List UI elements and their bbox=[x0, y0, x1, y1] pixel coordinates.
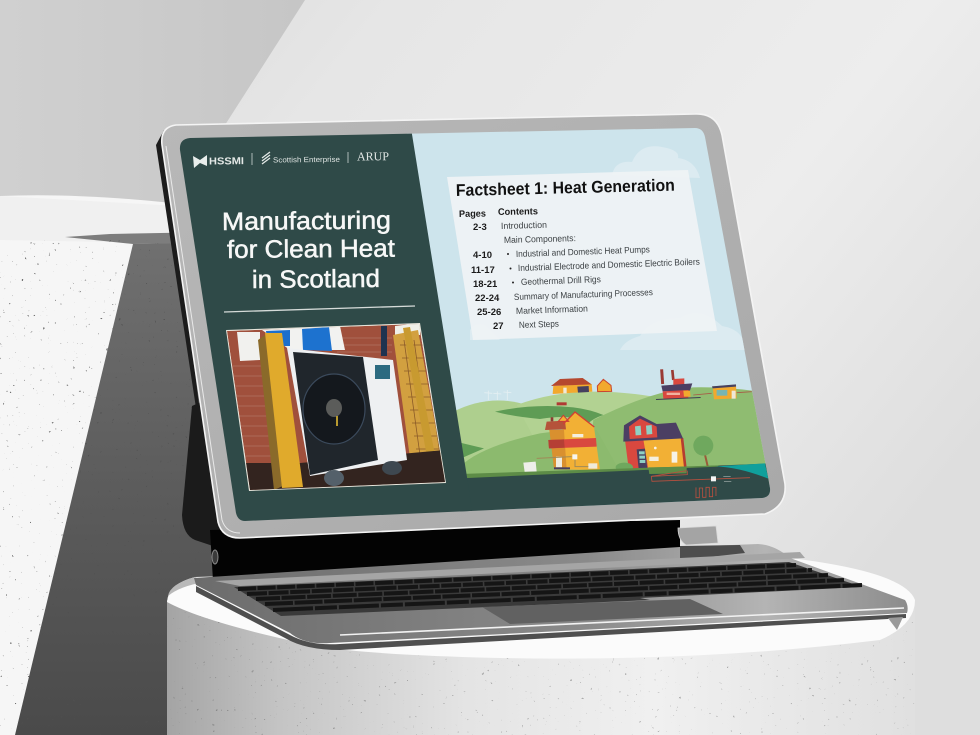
card heading: Factsheet 1: Heat Generation bbox=[456, 176, 675, 200]
farm house bbox=[551, 378, 612, 405]
panel: factsheet contents card bbox=[447, 170, 717, 340]
wooden lattice bbox=[393, 330, 442, 462]
tablet stand and hinge bbox=[156, 130, 718, 581]
brick courses bbox=[230, 338, 392, 456]
pages column: 27 bbox=[493, 321, 504, 332]
heat pump unit bbox=[523, 462, 537, 472]
contents column bbox=[501, 220, 700, 330]
title: Manufacturing bbox=[222, 207, 391, 236]
pages column: Contents bbox=[498, 206, 538, 218]
pedestal top surface bbox=[167, 558, 915, 659]
title bbox=[222, 207, 395, 294]
heat pump photo bbox=[226, 323, 446, 491]
title divider bbox=[224, 306, 415, 312]
hinge clip bbox=[678, 526, 718, 545]
logos bbox=[193, 149, 389, 168]
pages column: 11-17 bbox=[471, 265, 495, 276]
screen bbox=[170, 120, 780, 530]
panel: dark green cover bbox=[170, 128, 475, 530]
fence bbox=[258, 335, 282, 490]
title: in Scotland bbox=[252, 265, 380, 294]
pages column: 25-26 bbox=[477, 307, 501, 318]
pages column: 22-24 bbox=[475, 293, 500, 304]
keyboard front edge bbox=[196, 586, 906, 650]
tablet bbox=[162, 114, 785, 538]
pages column: 2-3 bbox=[473, 222, 487, 233]
tree bbox=[693, 436, 713, 466]
hills bbox=[453, 387, 777, 483]
contents column: Geothermal Drill Rigs bbox=[521, 274, 601, 287]
panel: landscape illustration bbox=[453, 369, 777, 523]
contents column: Industrial and Domestic Heat Pumps bbox=[516, 244, 650, 259]
pages column: 4-10 bbox=[473, 250, 492, 261]
ground bbox=[460, 463, 770, 512]
contents column: Summary of Manufacturing Processes bbox=[514, 287, 653, 302]
cloud top bbox=[612, 146, 700, 178]
keys bbox=[234, 562, 862, 616]
pages column bbox=[459, 206, 538, 332]
Scottish Enterprise logo: Scottish Enterprise bbox=[273, 155, 340, 164]
wind turbines bbox=[484, 390, 511, 400]
pedestal cast shadow bbox=[15, 242, 215, 735]
lower pedestal bbox=[167, 558, 915, 735]
tablet bezel bbox=[162, 114, 785, 538]
title: for Clean Heat bbox=[227, 235, 395, 264]
upper pedestal bbox=[0, 195, 215, 735]
contents column: Next Steps bbox=[519, 319, 559, 330]
trackpad bbox=[482, 599, 723, 624]
yellow house bbox=[523, 412, 600, 472]
panel: sky bbox=[405, 120, 780, 510]
keyboard bbox=[194, 544, 908, 650]
contents column: Market Information bbox=[516, 303, 588, 316]
pages column: 18-21 bbox=[473, 279, 498, 290]
unit casing bbox=[287, 348, 407, 476]
HSSMI logo: HSSMI bbox=[209, 156, 244, 167]
ground mulch bbox=[245, 450, 446, 490]
ARUP logo: ARUP bbox=[357, 149, 389, 163]
fan bbox=[303, 374, 365, 444]
purple roof house bbox=[616, 415, 687, 472]
cloud bottom bbox=[620, 320, 744, 350]
contents column: Industrial Electrode and Domestic Electric Boilers bbox=[518, 257, 700, 273]
contents column: Introduction bbox=[501, 220, 547, 231]
factory bbox=[656, 369, 752, 400]
pages column: Pages bbox=[459, 209, 486, 220]
unit badge bbox=[375, 365, 390, 379]
contents column: Main Components: bbox=[504, 233, 576, 245]
Scottish Enterprise logo bbox=[262, 152, 340, 164]
HSSMI logo bbox=[193, 155, 244, 168]
